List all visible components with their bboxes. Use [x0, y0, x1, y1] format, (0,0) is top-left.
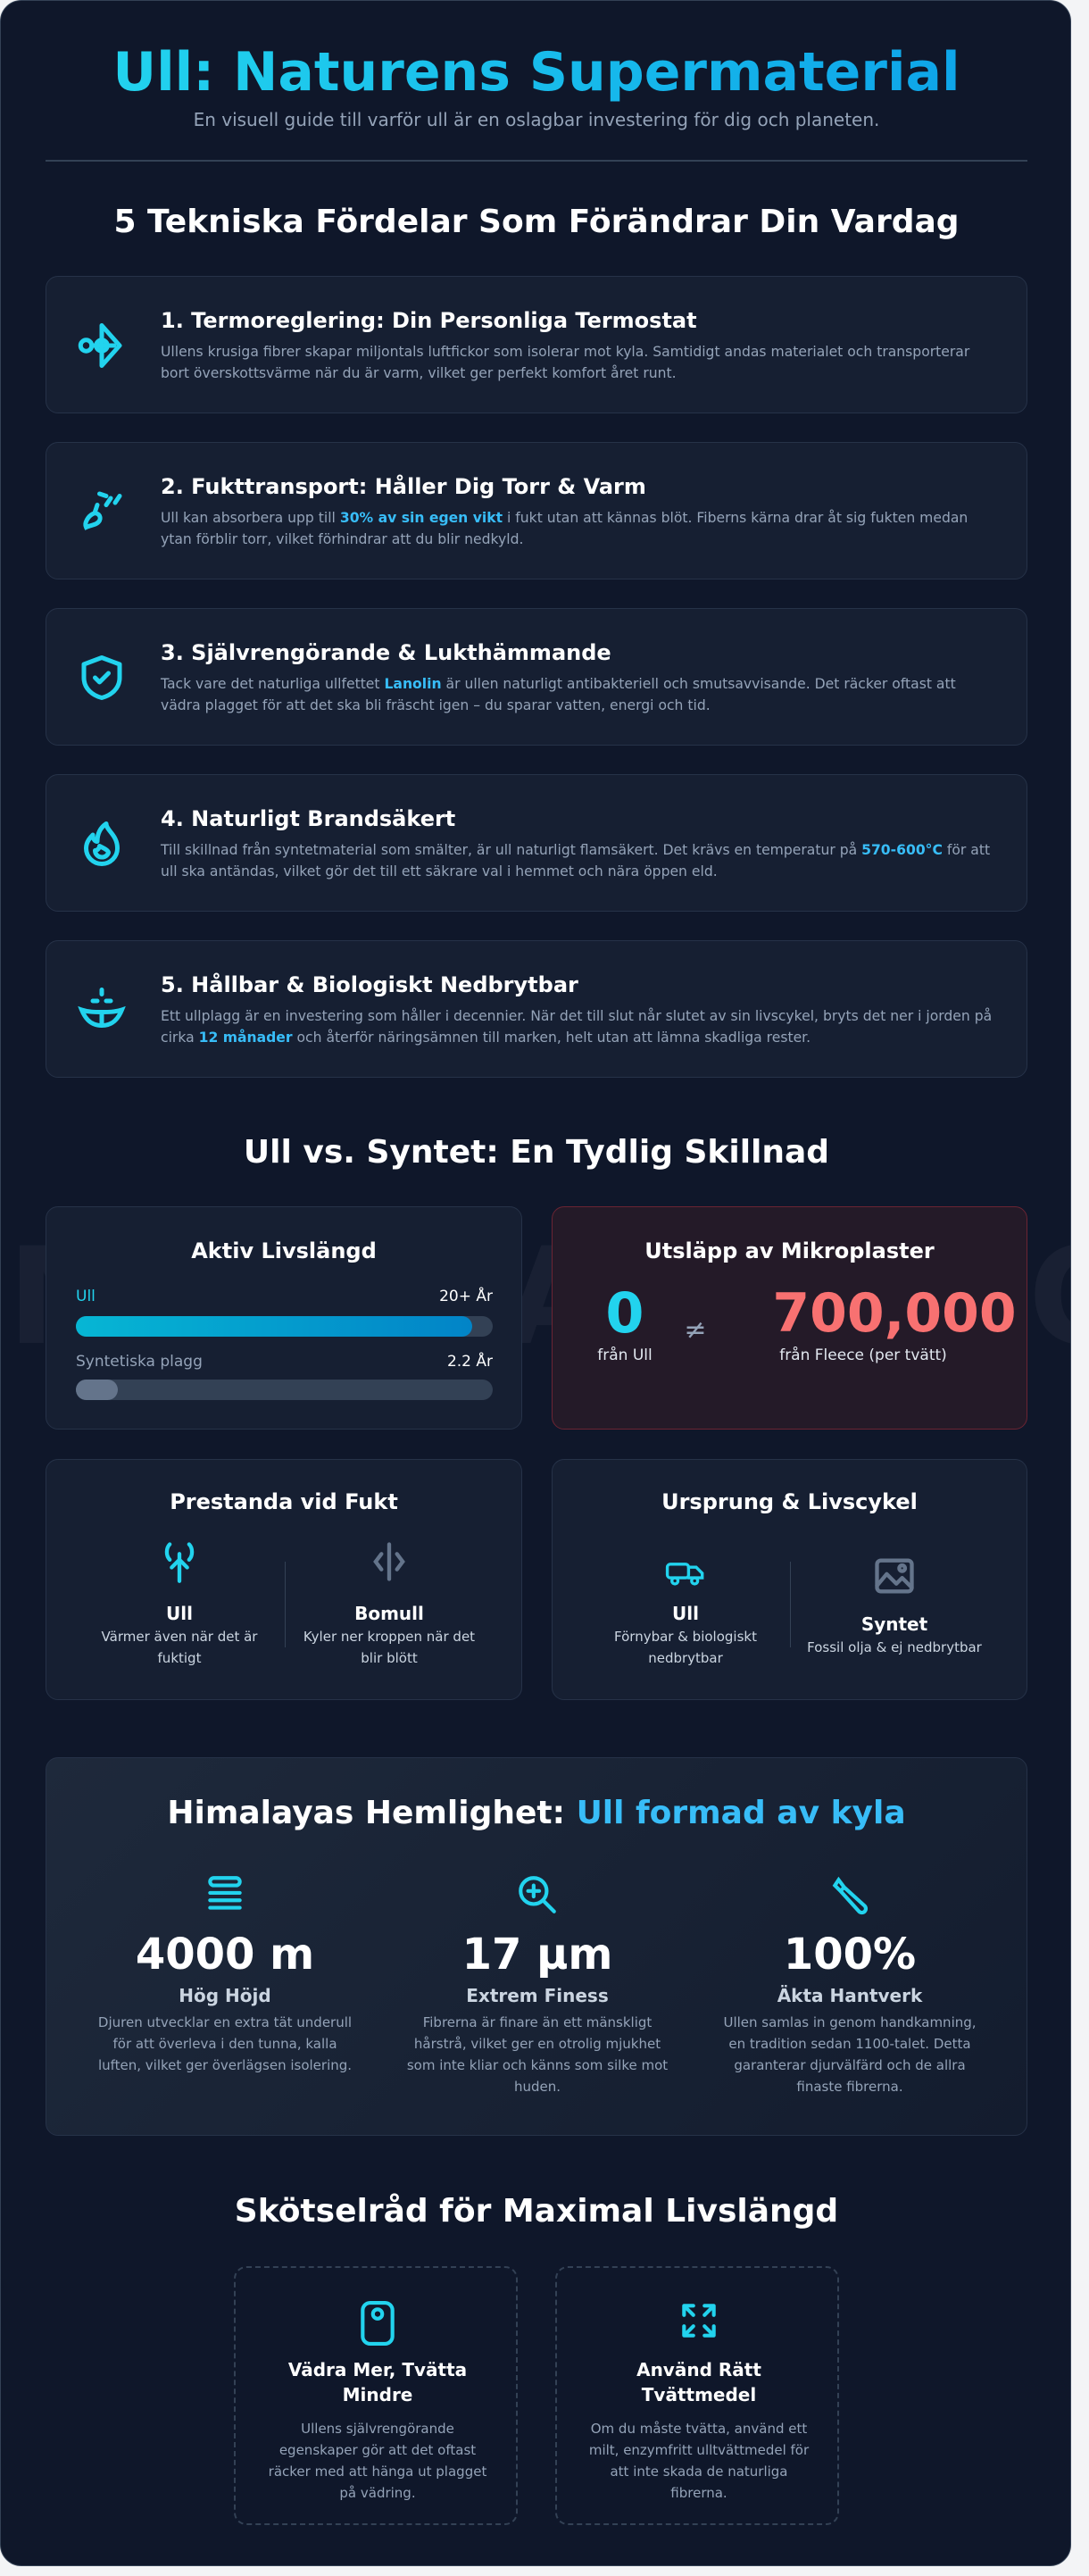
tip: tvättmedel: Använd Rätt Tvättmedel	[636, 2359, 761, 2405]
col: bomull: Kyler ner kroppen när det blir blött	[303, 1629, 475, 1666]
col: ull: Ull	[166, 1603, 193, 1624]
stat: finess: Fibrerna är finare än ett mänskligt hårstrå, vilket ger en otrolig mjukhet som inte kliar och känns som silke mot huden.	[407, 2014, 668, 2095]
stat: finess	[407, 1876, 668, 2095]
stat: hantverk: Äkta Hantverk	[777, 1985, 922, 2006]
panel: mikroplaster	[552, 1206, 1027, 1430]
subtitle: En visuell guide till varför ull är en oslagbar investering för dig och planeten.	[194, 109, 879, 130]
bar: syntet	[76, 1352, 493, 1400]
card 5: hållbar: 5. Hållbar & Biologiskt Nedbrytbar	[161, 972, 578, 997]
not equal: ≠	[684, 1314, 707, 1346]
col: syntet: Fossil olja & ej nedbrytbar	[807, 1639, 982, 1655]
icon: shield	[82, 655, 121, 700]
panel: himalaya	[46, 1757, 1027, 2136]
card 2: fukttransport: Ull kan absorbera upp till 30% av sin egen vikt i fukt utan att kännas blöt. Fiberns kärna drar åt sig fukten medan ytan förblir torr, vilket förhindrar att du blir nedkyld.	[161, 510, 968, 547]
stat: höjd: 4000 m	[136, 1930, 314, 1980]
bar: syntet: 2.2 År	[447, 1353, 493, 1371]
card 5: hållbar	[46, 940, 1027, 1078]
panel: aktiv livslängd: Aktiv Livslängd	[191, 1238, 377, 1263]
heading: fördelar: 5 Tekniska Fördelar Som Förändrar Din Vardag	[113, 204, 960, 240]
col: bomull: Bomull	[354, 1603, 424, 1624]
stat: hantverk: Ullen samlas in genom handkamning, en tradition sedan 1100-talet. Detta garanterar djurvälfärd och de allra finaste fibrerna.	[723, 2014, 977, 2095]
icon: sprout	[78, 988, 126, 1028]
panel: ursprung: Ursprung & Livscykel	[661, 1489, 918, 1514]
col: ull: Värmer även när det är fuktigt	[102, 1629, 257, 1666]
bar: ull: Ull	[76, 1288, 96, 1305]
card 3: självrengörande	[46, 608, 1027, 746]
bar: syntet: Syntetiska plagg	[76, 1353, 203, 1371]
card 4: brandsäkert: 4. Naturligt Brandsäkert	[161, 806, 455, 831]
title: Ull: Naturens Supermaterial	[112, 41, 960, 104]
stat: 0: 0	[605, 1280, 644, 1346]
card 2: fukttransport	[46, 442, 1027, 579]
stat: hantverk: 100%	[784, 1930, 916, 1980]
col: ull: Ull	[672, 1603, 699, 1624]
card 4: brandsäkert	[46, 774, 1027, 912]
stat: 0: från Ull	[597, 1346, 653, 1364]
card 3: självrengörande: 3. Självrengörande & Lukthämmande	[161, 640, 611, 665]
heading: skötselråd: Skötselråd för Maximal Livslängd	[235, 2193, 838, 2230]
stat: 700000: 700,000	[772, 1282, 1017, 1345]
stat: hantverk	[723, 1877, 977, 2095]
card 3: självrengörande: Tack vare det naturliga ullfettet Lanolin är ullen naturligt antibakteriell och smutsavvisande. Det räcker oftast att vädra plagget för att det ska bli fräscht igen – du sparar vatten, energi och tid.	[161, 676, 956, 713]
card 5: hållbar: Ett ullplagg är en investering som håller i decennier. När det till slut når slutet av sin livscykel, bryts det ner i jorden på cirka 12 månader och återför näringsämnen till marken, helt utan att lämna skadliga rester.	[161, 1008, 992, 1046]
tip: vädra: Ullens självrengörande egenskaper gör att det oftast räcker med att hänga ut plagget på vädring.	[269, 2421, 486, 2501]
tip: vädra: Vädra Mer, Tvätta Mindre	[288, 2359, 467, 2405]
heading: ull vs syntet: Ull vs. Syntet: En Tydlig Skillnad	[244, 1134, 829, 1171]
heading: himalaya: Himalayas Hemlighet: Ull formad av kyla	[167, 1795, 906, 1831]
tip: vädra	[234, 2266, 518, 2525]
col: ull	[102, 1542, 257, 1666]
stat: finess: Extrem Finess	[466, 1985, 609, 2006]
stat: höjd: Hög Höjd	[179, 1985, 271, 2006]
col: ull	[614, 1563, 757, 1666]
panel: ursprung	[552, 1459, 1027, 1700]
icon: thermo arrows	[79, 323, 122, 368]
card 1: termoreglering: Ullens krusiga fibrer skapar miljontals luftfickor som isolerar mot kyla. Samtidigt andas materialet och transporterar bort överskottsvärme när du är varm, vilket ger perfekt komfort året runt.	[161, 344, 969, 381]
panel: aktiv livslängd	[46, 1206, 522, 1430]
bar: ull: 20+ År	[439, 1288, 493, 1305]
stat: höjd: Djuren utvecklar en extra tät underull för att överleva i den tunna, kalla luften, vilket ger överlägsen isolering.	[98, 2014, 352, 2073]
col: syntet: Syntet	[861, 1613, 927, 1635]
card 1: termoreglering	[46, 276, 1027, 413]
card 2: fukttransport: 2. Fukttransport: Håller Dig Torr & Varm	[161, 474, 646, 499]
col: ull: Förnybar & biologiskt nedbrytbar	[614, 1629, 757, 1666]
stat: finess: 17 µm	[462, 1930, 612, 1980]
col: bomull	[303, 1542, 475, 1666]
col: syntet	[807, 1559, 982, 1655]
panel: fukt: Prestanda vid Fukt	[170, 1489, 398, 1514]
icon: droplets	[83, 491, 121, 530]
icon: flame	[84, 821, 120, 866]
bar: ull	[76, 1288, 493, 1337]
card 1: termoreglering: 1. Termoreglering: Din Personliga Termostat	[161, 308, 697, 333]
stat: 700000: från Fleece (per tvätt)	[779, 1346, 947, 1364]
tip: tvättmedel	[555, 2266, 839, 2525]
panel: mikroplaster: Utsläpp av Mikroplaster	[644, 1238, 935, 1263]
stat: höjd	[98, 1876, 352, 2073]
panel: fukt	[46, 1459, 522, 1700]
card 4: brandsäkert: Till skillnad från syntetmaterial som smälter, är ull naturligt flamsäkert. Det krävs en temperatur på 570-600°C för att ull ska antändas, vilket gör det till ett säkrare val i hemmet och nära öppen eld.	[161, 842, 990, 880]
tip: tvättmedel: Om du måste tvätta, använd ett milt, enzymfritt ulltvättmedel för att inte skada de naturliga fibrerna.	[589, 2421, 809, 2501]
stat: 0	[597, 1280, 653, 1364]
